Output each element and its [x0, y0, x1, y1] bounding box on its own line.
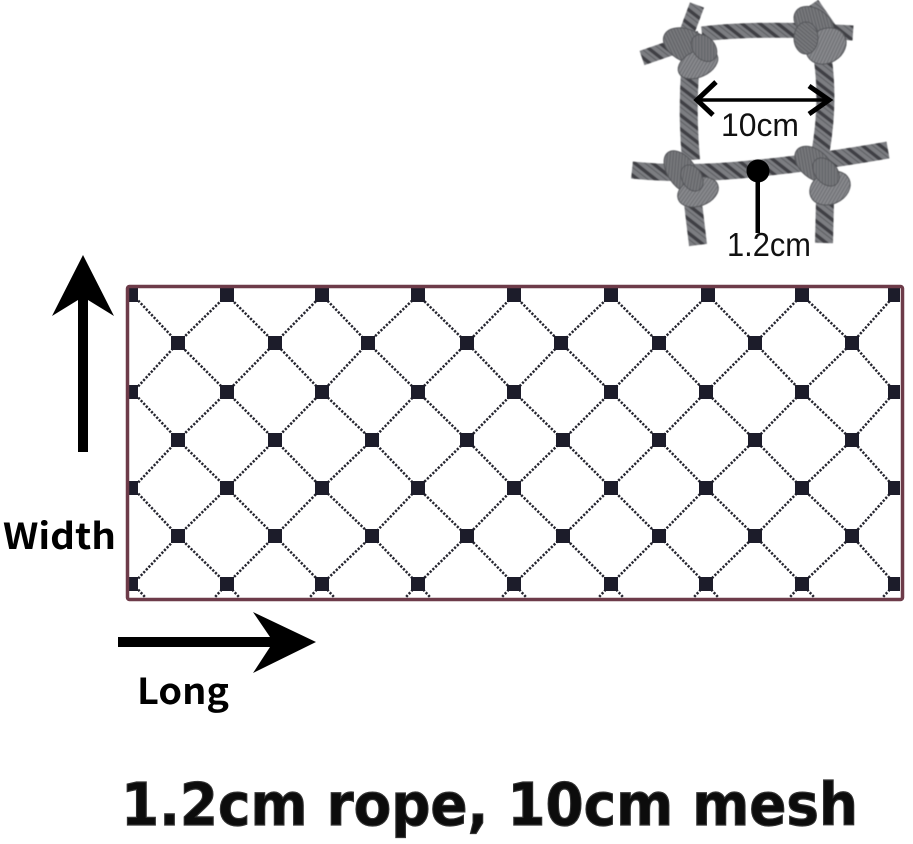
net frame: [128, 286, 902, 600]
label: Width: Width: [3, 508, 116, 560]
net knots: [128, 288, 900, 591]
net lines: [133, 295, 895, 597]
rope strands: [632, 4, 888, 245]
arrow: width direction: [52, 255, 114, 452]
label: 10cm: 10cm: [721, 107, 799, 143]
marker: rope diameter: [746, 160, 770, 233]
label: Long: Long: [137, 663, 229, 715]
title: 1.2cm rope, 10cm mesh: [121, 770, 858, 839]
icon: rope mesh detail: [632, 0, 888, 245]
arrow: 10cm span: [697, 82, 829, 115]
label: 1.2cm: 1.2cm: [727, 226, 811, 263]
arrow: long direction: [118, 612, 316, 673]
panel: net diagram: [128, 286, 902, 600]
rope knots: [657, 0, 856, 212]
